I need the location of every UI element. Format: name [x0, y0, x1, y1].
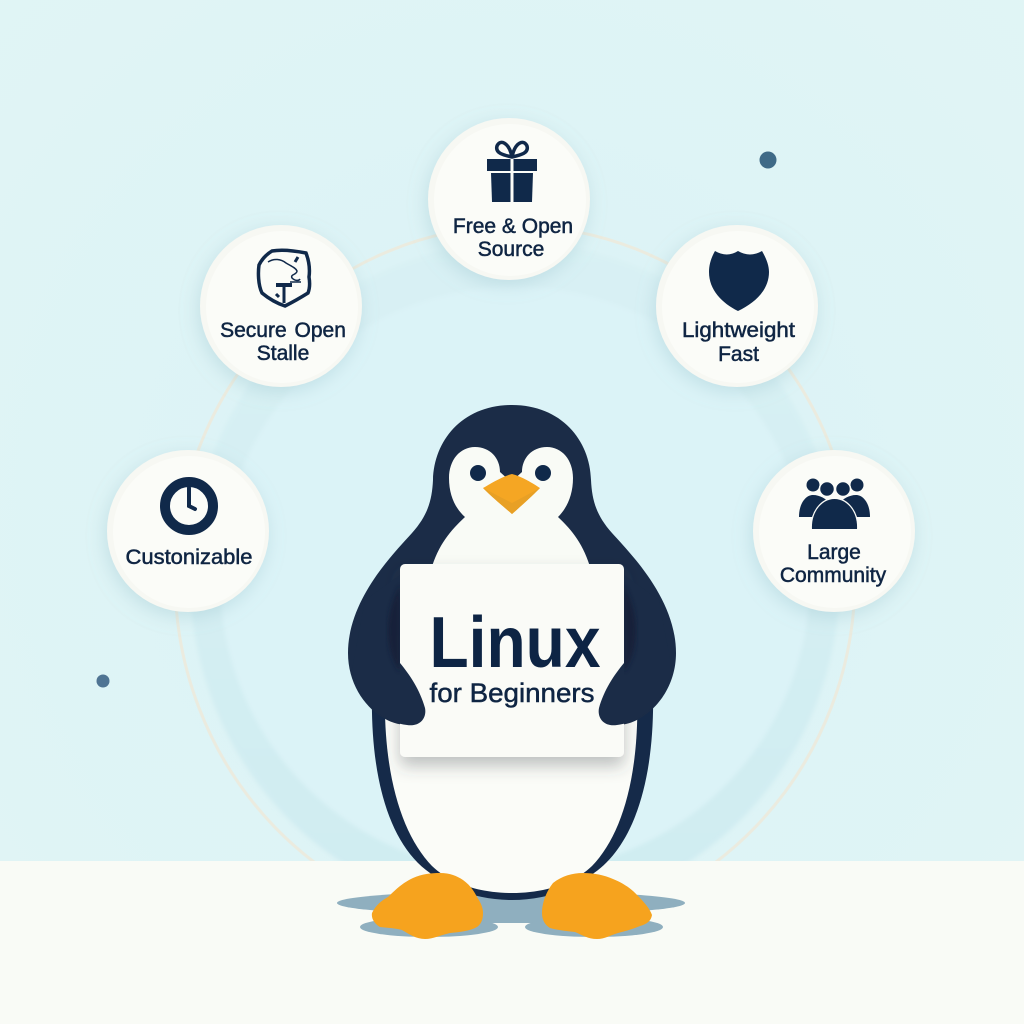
icon: clock — [165, 482, 213, 530]
label: Lightweight — [682, 319, 795, 342]
sign — [400, 564, 624, 757]
sign subtitle: for Beginners — [430, 678, 594, 708]
lower body outline — [372, 690, 653, 900]
label: Secure Open — [220, 319, 346, 342]
decorative dot: top right — [760, 152, 776, 168]
label: Fast — [718, 343, 759, 366]
badge: community — [753, 450, 915, 612]
penguin — [337, 405, 685, 939]
label: Custonizable — [126, 546, 252, 569]
label: Free & Open — [453, 215, 573, 238]
face and chest — [431, 447, 591, 570]
right flipper — [599, 575, 672, 725]
upper body and flippers silhouette — [348, 405, 676, 725]
beak — [483, 474, 540, 514]
shading beside sign — [388, 592, 636, 666]
label: Community — [780, 564, 887, 587]
floor shadows — [337, 891, 685, 937]
icon: shield — [709, 251, 769, 311]
floor — [0, 861, 1024, 1024]
ring decoration — [175, 226, 855, 930]
icon: shield outline — [258, 250, 310, 306]
eyes — [470, 465, 551, 481]
label: Large — [807, 541, 861, 564]
left flipper — [352, 575, 425, 725]
left foot — [372, 873, 483, 939]
right foot — [542, 873, 652, 939]
badge: customizable — [107, 450, 269, 612]
icon: people — [799, 478, 870, 529]
badge: lightweight — [656, 225, 818, 387]
sign title: Linux — [430, 603, 600, 683]
label: Stalle — [257, 342, 309, 365]
decorative dot: left — [96, 674, 110, 688]
badge: secure — [200, 225, 362, 387]
badge: free and open source — [428, 118, 590, 280]
icon: gift — [487, 142, 537, 202]
label: Source — [478, 238, 544, 261]
belly — [385, 690, 637, 893]
